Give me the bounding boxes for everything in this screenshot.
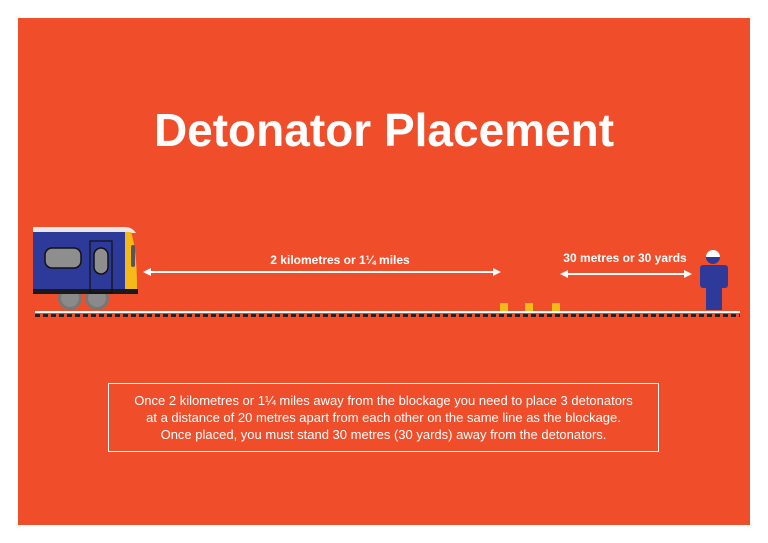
label: 2 km: 2 kilometres or 1¼ miles [270, 253, 410, 267]
detonators [500, 303, 560, 311]
title: Detonator Placement [154, 104, 614, 156]
text box [108, 383, 659, 452]
arrow: 2 km [143, 268, 501, 276]
icon: person [700, 250, 728, 310]
arrow: 30 m [560, 270, 692, 278]
text box: Once placed, you must stand 30 metres (30 yards) away from the detonators. [161, 427, 606, 442]
text box: at a distance of 20 metres apart from each other on the same line as the blockage. [146, 410, 621, 425]
label: 30 m: 30 metres or 30 yards [563, 251, 687, 265]
text box: Once 2 kilometres or 1¼ miles away from the blockage you need to place 3 detonators [134, 393, 633, 408]
icon: train [33, 227, 138, 310]
track [35, 311, 740, 316]
